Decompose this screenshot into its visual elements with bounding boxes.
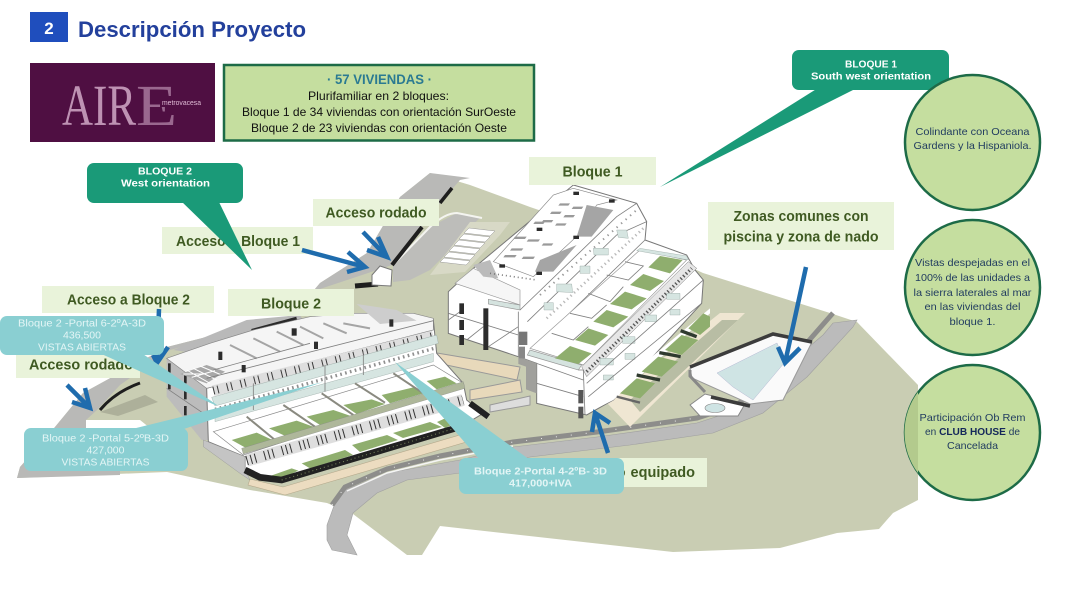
circle: Vistas despejadas — [905, 220, 1040, 355]
rooftop details — [473, 188, 617, 280]
access road, upper left — [17, 173, 470, 478]
label: Zonas comunes — [708, 202, 894, 250]
label: Bloque 1: Bloque 1 — [562, 164, 622, 180]
callout: Bloque 2 West orientation: BLOQUE 2 — [138, 166, 192, 178]
callout: Bloque 2 Portal 5: 427,000 — [86, 446, 125, 456]
arrow: to Acceso a Bloque 2 — [153, 309, 168, 363]
balconies and windows — [459, 280, 703, 418]
circle: Participación Ob Rem: Cancelada — [947, 440, 998, 452]
arrow: to equipado — [592, 413, 610, 453]
upper tiers with glass boxes — [540, 210, 643, 318]
title: Descripción Proyecto — [78, 17, 306, 42]
lower apartments row of Bloque 2 — [245, 400, 488, 480]
label: Acceso rodado (left) — [16, 353, 140, 378]
label: Acceso a Bloque 1: Acceso a Bloque 1 — [176, 233, 300, 250]
arrow: to Acceso rodado left — [67, 385, 90, 408]
callout: Bloque 2 Portal 4: Bloque 2-Portal 4-2ºB- 3D — [474, 466, 607, 478]
logo: AIRE metrovacesa: AIR — [62, 73, 136, 138]
circle: Vistas despejadas: en las viviendas del — [924, 301, 1020, 313]
label: equipado — [540, 458, 707, 487]
gate building — [372, 266, 392, 286]
callout: Bloque 2 Portal 5: VISTAS ABIERTAS — [62, 458, 150, 468]
terrain — [17, 173, 918, 555]
label: Acceso a Bloque 2: Acceso a Bloque 2 — [67, 292, 190, 308]
ground floor gardens — [593, 308, 710, 410]
circle: Participación Ob Rem: Participación Ob Rem — [920, 412, 1026, 424]
logo: AIRE metrovacesa: E — [136, 73, 177, 138]
callout: Bloque 1 South west orientation — [660, 50, 949, 187]
panel: 57 viviendas summary: · 57 VIVIENDAS · — [327, 72, 432, 87]
circle: Colindante: Gardens y la Hispaniola. — [914, 140, 1032, 152]
callout: Bloque 2 Portal 6: 436,500 — [63, 330, 101, 342]
arrow: to pool — [778, 267, 806, 363]
label: Acceso rodado (top): Acceso rodado — [326, 204, 426, 222]
logo: AIRE metrovacesa — [30, 63, 215, 142]
perimeter road with curved ramp — [327, 320, 857, 555]
label: Bloque 1 — [529, 157, 656, 185]
label: Bloque 2: Bloque 2 — [261, 296, 321, 312]
green terraces on Bloque 1 — [530, 248, 697, 377]
fence along perimeter road — [332, 313, 833, 505]
arrow: to Acceso a Bloque 1 — [302, 250, 365, 272]
site plan: axonometric view of terrain and buildings — [17, 173, 918, 555]
roof of Bloque 2 — [167, 304, 433, 388]
pool area — [690, 334, 812, 416]
callout: Bloque 2 Portal 4: 417,000+IVA — [509, 478, 572, 490]
label: Zonas comunes: piscina y zona de nado — [724, 228, 878, 246]
section number badge — [30, 12, 68, 42]
label: Acceso rodado (top) — [313, 199, 439, 226]
circle: Vistas despejadas: Vistas despejadas en el — [915, 257, 1030, 269]
label: Zonas comunes: Zonas comunes con — [734, 208, 868, 225]
callout: Bloque 2 West orientation: West orientation — [121, 178, 210, 190]
black retaining walls — [100, 188, 452, 410]
terraces of Bloque 2 — [213, 365, 465, 455]
circle: Colindante — [905, 75, 1040, 210]
parking lot area — [393, 213, 480, 282]
callout: Bloque 2 Portal 6: VISTAS ABIERTAS — [38, 342, 126, 354]
circle: Participación Ob Rem: en CLUB HOUSE de — [925, 426, 1020, 438]
section number badge: 2 — [44, 19, 54, 38]
callout: Bloque 2 Portal 5: Bloque 2 -Portal 5-2ºB-3D — [42, 434, 169, 444]
callout: Bloque 2 Portal 4 — [395, 362, 624, 494]
circle: Vistas despejadas: la sierra laterales al mar — [914, 287, 1032, 299]
label: equipado: Gimnasio equipado — [559, 465, 695, 481]
circle: Colindante: Colindante con Oceana — [916, 126, 1030, 138]
callout: Bloque 2 West orientation — [87, 163, 252, 270]
circle: Participación Ob Rem — [905, 365, 1040, 500]
circle: Vistas despejadas: 100% de las unidades a — [915, 272, 1030, 284]
arrow: to Acceso rodado top — [363, 232, 387, 257]
label: Acceso a Bloque 2 — [42, 286, 214, 313]
label: Acceso a Bloque 1 — [162, 227, 313, 254]
logo: AIRE metrovacesa: metrovacesa — [162, 98, 202, 107]
callout: Bloque 2 Portal 5 — [24, 382, 323, 471]
beige promenade and ramps — [607, 313, 745, 427]
label: Bloque 2 — [228, 289, 354, 316]
building: Bloque 2 — [167, 304, 488, 482]
panel: 57 viviendas summary: Bloque 2 de 23 viviendas con orientación Oeste — [251, 121, 507, 135]
circle: Vistas despejadas: bloque 1. — [950, 316, 996, 328]
callout: Bloque 1 South west orientation: South west orientation — [811, 72, 931, 82]
label: Acceso rodado (left): Acceso rodado — [29, 356, 133, 374]
building: Bloque 1 — [448, 185, 710, 418]
panel: 57 viviendas summary: Bloque 1 de 34 viviendas con orientación SurOeste — [242, 105, 516, 119]
panel: 57 viviendas summary: Plurifamiliar en 2 bloques: — [308, 89, 449, 103]
panel: 57 viviendas summary — [224, 65, 534, 140]
callout: Bloque 1 South west orientation: BLOQUE 1 — [845, 60, 897, 70]
callout: Bloque 2 Portal 6 — [0, 316, 217, 405]
upper windows of Bloque 2 — [213, 336, 433, 391]
callout: Bloque 2 Portal 6: Bloque 2 -Portal 6-2ºA-3D — [18, 318, 146, 330]
glass balconies of Bloque 2 — [212, 335, 438, 422]
